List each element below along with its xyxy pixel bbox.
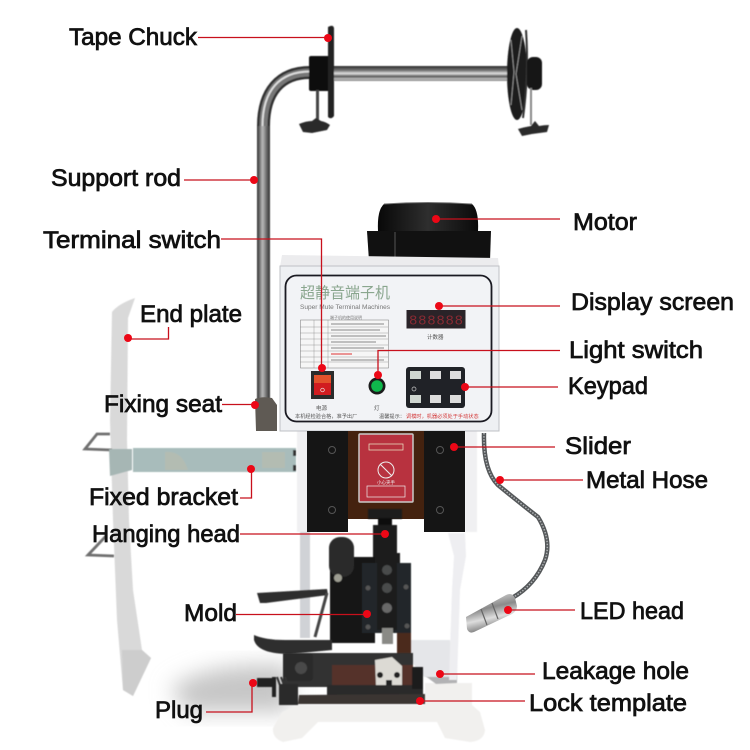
slider assembly: 小心夹手 [377,479,395,486]
label: Fixing seat: Fixing seat [104,391,222,418]
label: Lock template: Lock template [529,690,687,717]
label: Keypad: Keypad [568,373,648,400]
panel subtitle: Super Mute Terminal Machines [300,304,391,311]
hanging head and mold [254,509,411,661]
label: Motor [432,209,637,236]
curved guide [254,635,332,654]
machine frame columns [297,430,477,680]
label: End plate [124,301,242,342]
tape chuck right [507,28,549,136]
light button [368,378,386,412]
label: Support rod [51,165,258,192]
label: Metal Hose: Metal Hose [586,467,708,494]
label: Mold [184,600,371,627]
metal hose and LED head [466,433,547,633]
slider blocks [307,431,348,532]
label: Display screen [435,289,734,316]
fixing seat collar [255,397,277,431]
label: Plug: Plug [155,697,203,724]
power switch [311,371,334,412]
label: Motor: Motor [573,209,637,236]
slider assembly [307,431,465,532]
label: Hanging head [92,521,389,548]
light button: 灯 [374,404,380,412]
metal hose [484,433,547,598]
spec table: 端子机的使用说明 [330,314,362,320]
display screen: 计数器 [427,333,444,341]
crimp table and lock template [257,653,425,705]
keypad [406,367,465,408]
label: LED head [504,598,684,625]
fixed bracket [109,448,296,476]
label: Leakage hole [436,658,689,685]
handles [85,434,114,556]
floor shadow [170,665,290,712]
display screen [406,310,466,341]
label: Terminal switch [43,227,326,372]
label: Metal Hose [496,467,708,494]
label: Support rod: Support rod [51,165,181,192]
label: End plate: End plate [140,301,242,328]
label: Fixed bracket: Fixed bracket [89,484,238,511]
label: Lock template [416,690,687,717]
control panel [280,255,499,431]
support rod [257,66,510,400]
label: Slider: Slider [565,433,631,460]
hanging head [368,509,402,519]
label: Tape Chuck [69,24,332,51]
motor dome [378,202,478,231]
label: Hanging head: Hanging head [92,521,240,548]
label: Leakage hole: Leakage hole [542,658,689,685]
tape holder and support rod [257,26,549,400]
label: Light switch: Light switch [569,337,703,364]
label: LED head: LED head [580,598,684,625]
label: Mold: Mold [184,600,237,627]
end plate [85,298,151,696]
panel footer: 调模时，机器必须处于手动状态 [406,412,479,420]
motor [367,202,491,261]
panel footer: 本机经检验合格，准予出厂 [295,412,357,420]
label: Keypad [461,373,648,400]
label: Slider [450,433,631,460]
base [273,675,485,742]
label: Display screen: Display screen [571,289,734,316]
plug [257,677,298,705]
label: Light switch [374,337,703,379]
label: Terminal switch: Terminal switch [43,227,221,254]
label: Plug [155,679,257,724]
warning plate [359,434,413,502]
display screen: 888888 [409,314,463,330]
lever [257,589,328,603]
tape chuck left [299,26,334,133]
LED head [466,594,517,633]
motor base [367,231,491,261]
label: Tape Chuck: Tape Chuck [69,24,198,51]
panel title: 超静音端子机 [300,284,390,302]
panel footer: 温馨提示： [379,412,405,420]
spec table [300,314,388,368]
mold body [373,553,400,565]
panel border [286,276,492,422]
power switch: 电源 [316,404,328,412]
label: Fixed bracket [89,465,255,511]
panel footer [295,412,479,420]
